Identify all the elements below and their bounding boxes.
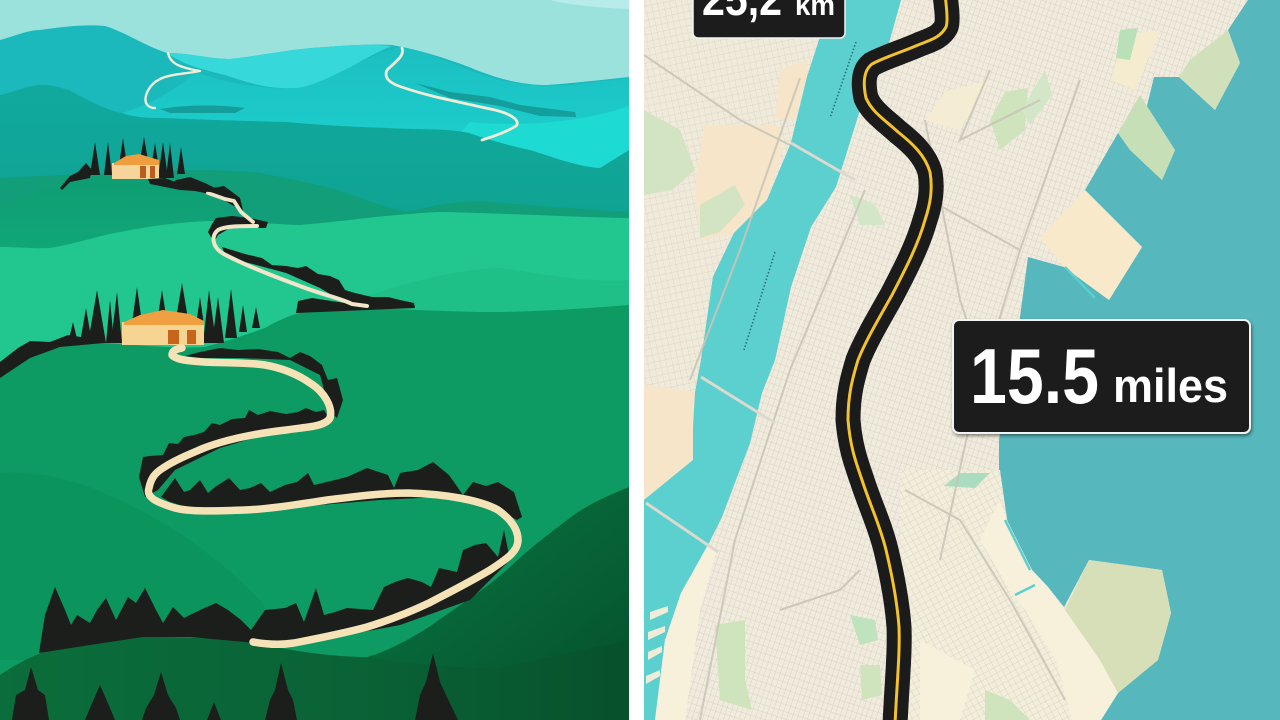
middle meadow band <box>300 268 629 340</box>
distance label: miles: 15.5 <box>970 332 1099 420</box>
far hills <box>0 25 629 168</box>
panel: landscape with winding road <box>0 0 629 720</box>
house on far hill with cypresses <box>60 137 240 198</box>
west piers <box>646 606 668 684</box>
river <box>644 0 901 720</box>
upper road tree bands <box>172 177 415 313</box>
hilltop shrubs <box>148 178 240 198</box>
main winding road <box>148 348 518 644</box>
house hill <box>20 247 52 248</box>
distance label: kilometres <box>693 0 845 38</box>
parks <box>715 28 1171 720</box>
cypress group <box>60 137 185 190</box>
panel: city map with route <box>644 0 1280 720</box>
dark right hill <box>368 487 629 668</box>
peach waterfront block <box>1040 190 1142 300</box>
cypress row <box>68 283 260 343</box>
farmhouse <box>112 163 159 179</box>
distant roads <box>146 48 517 140</box>
west cream blocks <box>644 60 807 500</box>
left shrubs <box>0 335 104 378</box>
tree band: middle bend <box>139 408 330 497</box>
distant tree lines <box>160 83 576 117</box>
dark teal ridge <box>0 85 629 212</box>
main green hill <box>0 305 629 675</box>
ferry dotted lines <box>744 42 856 350</box>
distance label: miles <box>953 320 1250 433</box>
pale sliver of cloud <box>550 0 629 9</box>
light green meadow <box>0 212 629 378</box>
cream areas <box>655 30 1160 720</box>
distance label: miles: miles <box>1113 359 1228 412</box>
farmhouse <box>122 322 204 345</box>
tree band: lower long forest <box>39 530 510 653</box>
south-east grid <box>900 470 1072 720</box>
back green hill <box>0 170 629 225</box>
west parks <box>644 110 745 301</box>
house on near hill with cypresses <box>0 283 260 378</box>
upper road segments <box>208 193 367 306</box>
foreground trees <box>12 653 458 720</box>
port piers <box>1005 267 1095 595</box>
map western bank <box>644 0 830 500</box>
tree band: upper lobe <box>185 348 343 418</box>
route road <box>848 0 947 720</box>
bridges <box>646 143 855 552</box>
major streets <box>644 55 1080 720</box>
lower left hill <box>0 472 300 660</box>
sky <box>0 0 629 85</box>
central city land <box>655 0 1248 720</box>
front hill <box>0 637 367 720</box>
tree band: inner lower bend <box>161 462 522 520</box>
map water base <box>644 0 1280 720</box>
